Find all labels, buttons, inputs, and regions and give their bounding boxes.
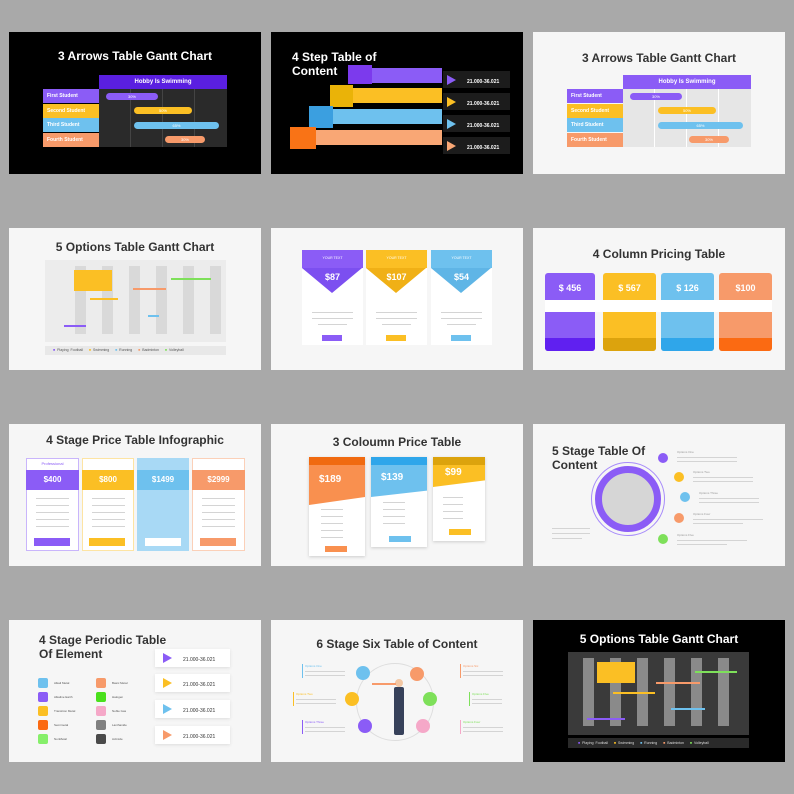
- slide 8: 3 column price table: [271, 424, 523, 566]
- chart: [45, 260, 226, 342]
- pricing cards: YOUR TEXT: [387, 256, 406, 260]
- value cards: 21.000-36.021: [183, 734, 215, 740]
- price cards: $99: [445, 467, 462, 478]
- gantt table: First Student: [571, 93, 602, 99]
- options text: Options Five: [472, 692, 489, 696]
- gantt table: 30%: [181, 137, 189, 142]
- steps: [290, 65, 510, 154]
- gantt table: 30%: [652, 94, 660, 99]
- title: 3 Arrows Table Gantt Chart: [582, 51, 736, 65]
- price cards: $189: [319, 474, 341, 485]
- pricing cards: $54: [454, 272, 469, 282]
- price cards: $2999: [207, 475, 230, 484]
- value cards: [154, 649, 230, 746]
- slide 9: 5 stage table of content: [533, 424, 785, 566]
- title: 3 Coloumn Price Table: [333, 435, 461, 449]
- chart: [568, 652, 749, 735]
- title: 4 Step Table of: [292, 50, 376, 64]
- value cards: 21.000-36.021: [183, 682, 215, 688]
- slide 5: 3 pricing cards: [271, 228, 523, 370]
- gantt table: 30%: [705, 137, 713, 142]
- legend squares: Noble Gas: [112, 709, 126, 713]
- price cards: [26, 458, 245, 551]
- gantt table: Hobby Is Swimming: [658, 79, 716, 85]
- price cards: $1499: [152, 475, 174, 484]
- options text: Options Two: [296, 692, 313, 696]
- options text: Options Four: [463, 720, 480, 724]
- title: 4 Stage Price Table Infographic: [46, 433, 224, 447]
- gantt table: Third Student: [571, 122, 604, 128]
- title: Content: [552, 458, 597, 472]
- pricing columns: $ 456: [559, 283, 581, 293]
- price cards: [308, 456, 486, 558]
- gantt table: [567, 75, 751, 147]
- legend: ■ Playing Football ■ Swimming ■ Running ■ Badminton ■ Volleyball: [578, 741, 709, 745]
- price cards: $800: [99, 475, 117, 484]
- title: [39, 633, 166, 661]
- slide 12: 5 options gantt dark: [533, 620, 785, 762]
- slide 3: 3 arrows gantt light: [533, 32, 785, 174]
- pricing columns: $ 126: [676, 283, 699, 293]
- gantt table: Second Student: [47, 108, 85, 114]
- gantt table: Fourth Student: [571, 137, 607, 143]
- legend squares: Alkaline Earth: [54, 695, 73, 699]
- legend squares: Transition Metal: [54, 709, 75, 713]
- legend squares: NonMetal: [54, 737, 67, 741]
- legend: [45, 346, 226, 355]
- legend squares: Basic Metal: [112, 681, 128, 685]
- bottom left text: [552, 528, 590, 539]
- title: 3 Arrows Table Gantt Chart: [58, 49, 212, 63]
- gantt table: First Student: [47, 93, 78, 99]
- options text: Options One: [305, 664, 322, 668]
- price cards: $139: [381, 472, 403, 483]
- globe circle: [591, 462, 665, 536]
- slide 11: 6 stage table of content: [271, 620, 523, 762]
- options list: Options One: [677, 450, 694, 454]
- pricing cards: YOUR TEXT: [323, 256, 342, 260]
- legend squares: [38, 678, 128, 744]
- gantt table: Second Student: [571, 108, 609, 114]
- title: 5 Stage Table Of: [552, 444, 645, 458]
- options list: [658, 450, 763, 545]
- gantt table: 50%: [683, 108, 691, 113]
- title: Of Element: [39, 647, 102, 661]
- price cards: $400: [44, 475, 61, 484]
- title: [552, 444, 646, 472]
- title: [292, 50, 377, 78]
- price cards: Professional: [41, 461, 64, 466]
- options text: Options Three: [305, 720, 324, 724]
- gantt table: 65%: [172, 123, 180, 128]
- pricing columns: $ 567: [618, 283, 641, 293]
- steps: 21.000-36.021: [467, 145, 499, 151]
- gantt table: 65%: [696, 123, 704, 128]
- pricing cards: YOUR TEXT: [452, 256, 471, 260]
- options list: Options Two: [693, 470, 710, 474]
- pricing cards: [302, 250, 492, 345]
- pricing columns: [545, 273, 772, 351]
- legend: ■ Playing Football ■ Swimming ■ Running ■ Badminton ■ Volleyball: [53, 348, 184, 352]
- slide 2: 4 step table of content dark: [271, 32, 523, 174]
- slide 10: 4 stage periodic table: [9, 620, 261, 762]
- circle diagram: [345, 663, 437, 741]
- legend squares: Lanthanide: [112, 723, 127, 727]
- gantt table: 30%: [128, 94, 136, 99]
- legend squares: Semimetal: [54, 723, 68, 727]
- gantt table: 50%: [159, 108, 167, 113]
- value cards: 21.000-36.021: [183, 657, 215, 663]
- options list: Options Four: [693, 512, 710, 516]
- value cards: 21.000-36.021: [183, 708, 215, 714]
- title: 5 Options Table Gantt Chart: [580, 632, 738, 646]
- legend: [568, 738, 749, 748]
- slide 7: 4 stage price table: [9, 424, 261, 566]
- title: 6 Stage Six Table of Content: [316, 637, 478, 651]
- legend squares: Actinide: [112, 737, 123, 741]
- steps: 21.000-36.021: [467, 79, 499, 85]
- options text: Options Six: [463, 664, 478, 668]
- title: 4 Stage Periodic Table: [39, 633, 166, 647]
- slide 4: 5 options gantt light: [9, 228, 261, 370]
- gantt table: Fourth Student: [47, 137, 83, 143]
- legend squares: Halogen: [112, 695, 123, 699]
- slide 1: 3 arrows gantt dark: [9, 32, 261, 174]
- pricing cards: $107: [386, 272, 407, 282]
- legend squares: Alkali Metal: [54, 681, 69, 685]
- steps: 21.000-36.021: [467, 123, 499, 129]
- pricing columns: $100: [735, 283, 756, 293]
- options text: [293, 664, 503, 734]
- slide 6: 4 column pricing table: [533, 228, 785, 370]
- gantt table: [43, 75, 227, 147]
- pricing cards: $87: [325, 272, 340, 282]
- gantt table: Hobby Is Swimming: [134, 79, 192, 85]
- title: 4 Column Pricing Table: [593, 247, 725, 261]
- title: Content: [292, 64, 337, 78]
- title: 5 Options Table Gantt Chart: [56, 240, 214, 254]
- gantt table: Third Student: [47, 122, 80, 128]
- options list: Options Five: [677, 533, 694, 537]
- steps: 21.000-36.021: [467, 101, 499, 107]
- options list: Options Three: [699, 491, 718, 495]
